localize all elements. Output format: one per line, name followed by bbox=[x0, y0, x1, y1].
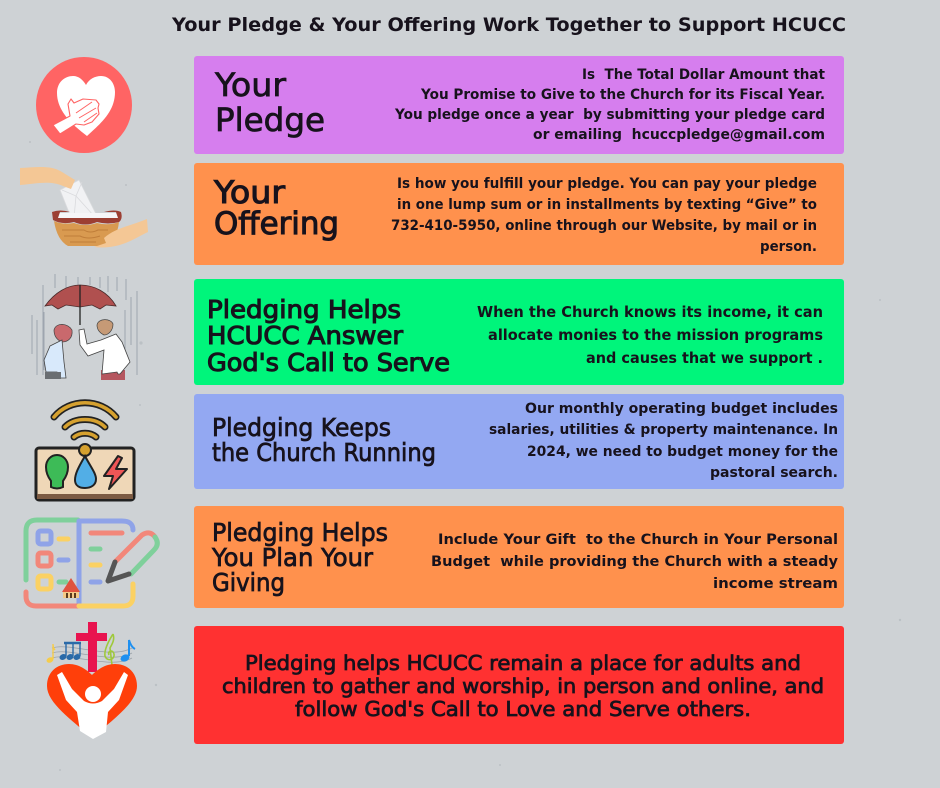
text: offering description: 732-410-5950, online through our Website, by mail or in bbox=[391, 218, 817, 234]
heading: your pledge bbox=[214, 66, 325, 139]
text: plan description: Include Your Gift to the Church in Your Personal bbox=[438, 532, 838, 548]
text: running description: pastoral search. bbox=[710, 465, 838, 481]
text: offering description: person. bbox=[760, 239, 817, 255]
text: offering description: Is how you fulfill your pledge. You can pay your pledge bbox=[397, 176, 817, 192]
heading: answer god's call: HCUCC Answer bbox=[207, 321, 404, 350]
lightning bbox=[104, 456, 127, 489]
icon: heart and hand bbox=[36, 57, 132, 153]
heading: plan your giving bbox=[211, 518, 388, 597]
text: answer description bbox=[477, 303, 823, 367]
text: pledge description: or emailing hcuccpledge@gmail.com bbox=[533, 127, 825, 143]
text: plan description: income stream bbox=[713, 576, 838, 592]
heart with raised arms bbox=[47, 664, 137, 738]
panel: your pledge bbox=[194, 56, 844, 154]
heading: plan your giving: You Plan Your bbox=[211, 543, 374, 572]
panel: plan your giving bbox=[194, 506, 844, 608]
water drop bbox=[75, 456, 96, 488]
title: Your Pledge & Your Offering Work Together to Support HCUCC bbox=[171, 14, 846, 36]
heading: your offering: Your bbox=[213, 175, 285, 211]
heading: keeps the church running: the Church Running bbox=[212, 438, 436, 467]
panel: answer god's call bbox=[194, 279, 844, 385]
panel: worship summary bbox=[194, 626, 844, 744]
icon: utilities bbox=[36, 403, 134, 500]
figure: helping person bbox=[79, 320, 130, 380]
text: pledge description bbox=[394, 67, 825, 143]
text: running description: 2024, we need to budget money for the bbox=[527, 444, 838, 460]
icon: umbrella and two people bbox=[32, 274, 137, 380]
text: worship summary: children to gather and worship, in person and online, and bbox=[222, 674, 824, 698]
icon: budget planner bbox=[26, 520, 157, 606]
heading: your pledge: Your bbox=[214, 66, 287, 104]
text: offering description: in one lump sum or in installments by texting “Give” to bbox=[397, 197, 817, 213]
text: answer description: and causes that we support . bbox=[586, 349, 823, 367]
text: plan description bbox=[431, 532, 839, 592]
heading: your pledge: Pledge bbox=[215, 101, 325, 139]
icon: offering basket bbox=[20, 167, 148, 247]
heading: answer god's call bbox=[207, 295, 450, 377]
heading: answer god's call: Pledging Helps bbox=[207, 295, 401, 324]
cross bbox=[76, 622, 107, 672]
heading: plan your giving: Giving bbox=[212, 568, 285, 597]
heading: your offering bbox=[213, 175, 339, 242]
music notes bbox=[46, 634, 135, 665]
text: pledge description: Is The Total Dollar Amount that bbox=[582, 67, 825, 83]
heading: plan your giving: Pledging Helps bbox=[212, 518, 388, 547]
text: running description: salaries, utilities & property maintenance. In bbox=[489, 422, 838, 438]
text: worship summary: follow God's Call to Love and Serve others. bbox=[295, 697, 751, 721]
text: answer description: When the Church knows its income, it can bbox=[477, 303, 823, 321]
icon: small church bbox=[62, 578, 80, 598]
heading: answer god's call: God's Call to Serve bbox=[207, 348, 450, 377]
text: answer description: allocate monies to the mission programs bbox=[488, 326, 823, 344]
text: worship summary: Pledging helps HCUCC remain a place for adults and bbox=[245, 651, 801, 675]
text: offering description bbox=[391, 176, 817, 255]
heading: keeps the church running: Pledging Keeps bbox=[212, 413, 391, 442]
text: pledge description: You pledge once a year by submitting your pledge card bbox=[394, 107, 825, 123]
text: running description bbox=[489, 401, 838, 481]
heading: your offering: Offering bbox=[214, 206, 339, 242]
icon: cross, music and heart bbox=[46, 622, 137, 739]
panel: your offering bbox=[194, 163, 844, 265]
text: plan description: Budget while providing the Church with a steady bbox=[431, 554, 839, 570]
figure: sad person bbox=[44, 324, 72, 379]
heading: keeps the church running bbox=[212, 413, 436, 467]
text: worship summary bbox=[222, 651, 824, 721]
panel: keeps the church running bbox=[194, 394, 844, 489]
text: pledge description: You Promise to Give to the Church for its Fiscal Year. bbox=[420, 87, 825, 103]
text: running description: Our monthly operating budget includes bbox=[525, 401, 838, 417]
bulb bbox=[46, 455, 68, 488]
